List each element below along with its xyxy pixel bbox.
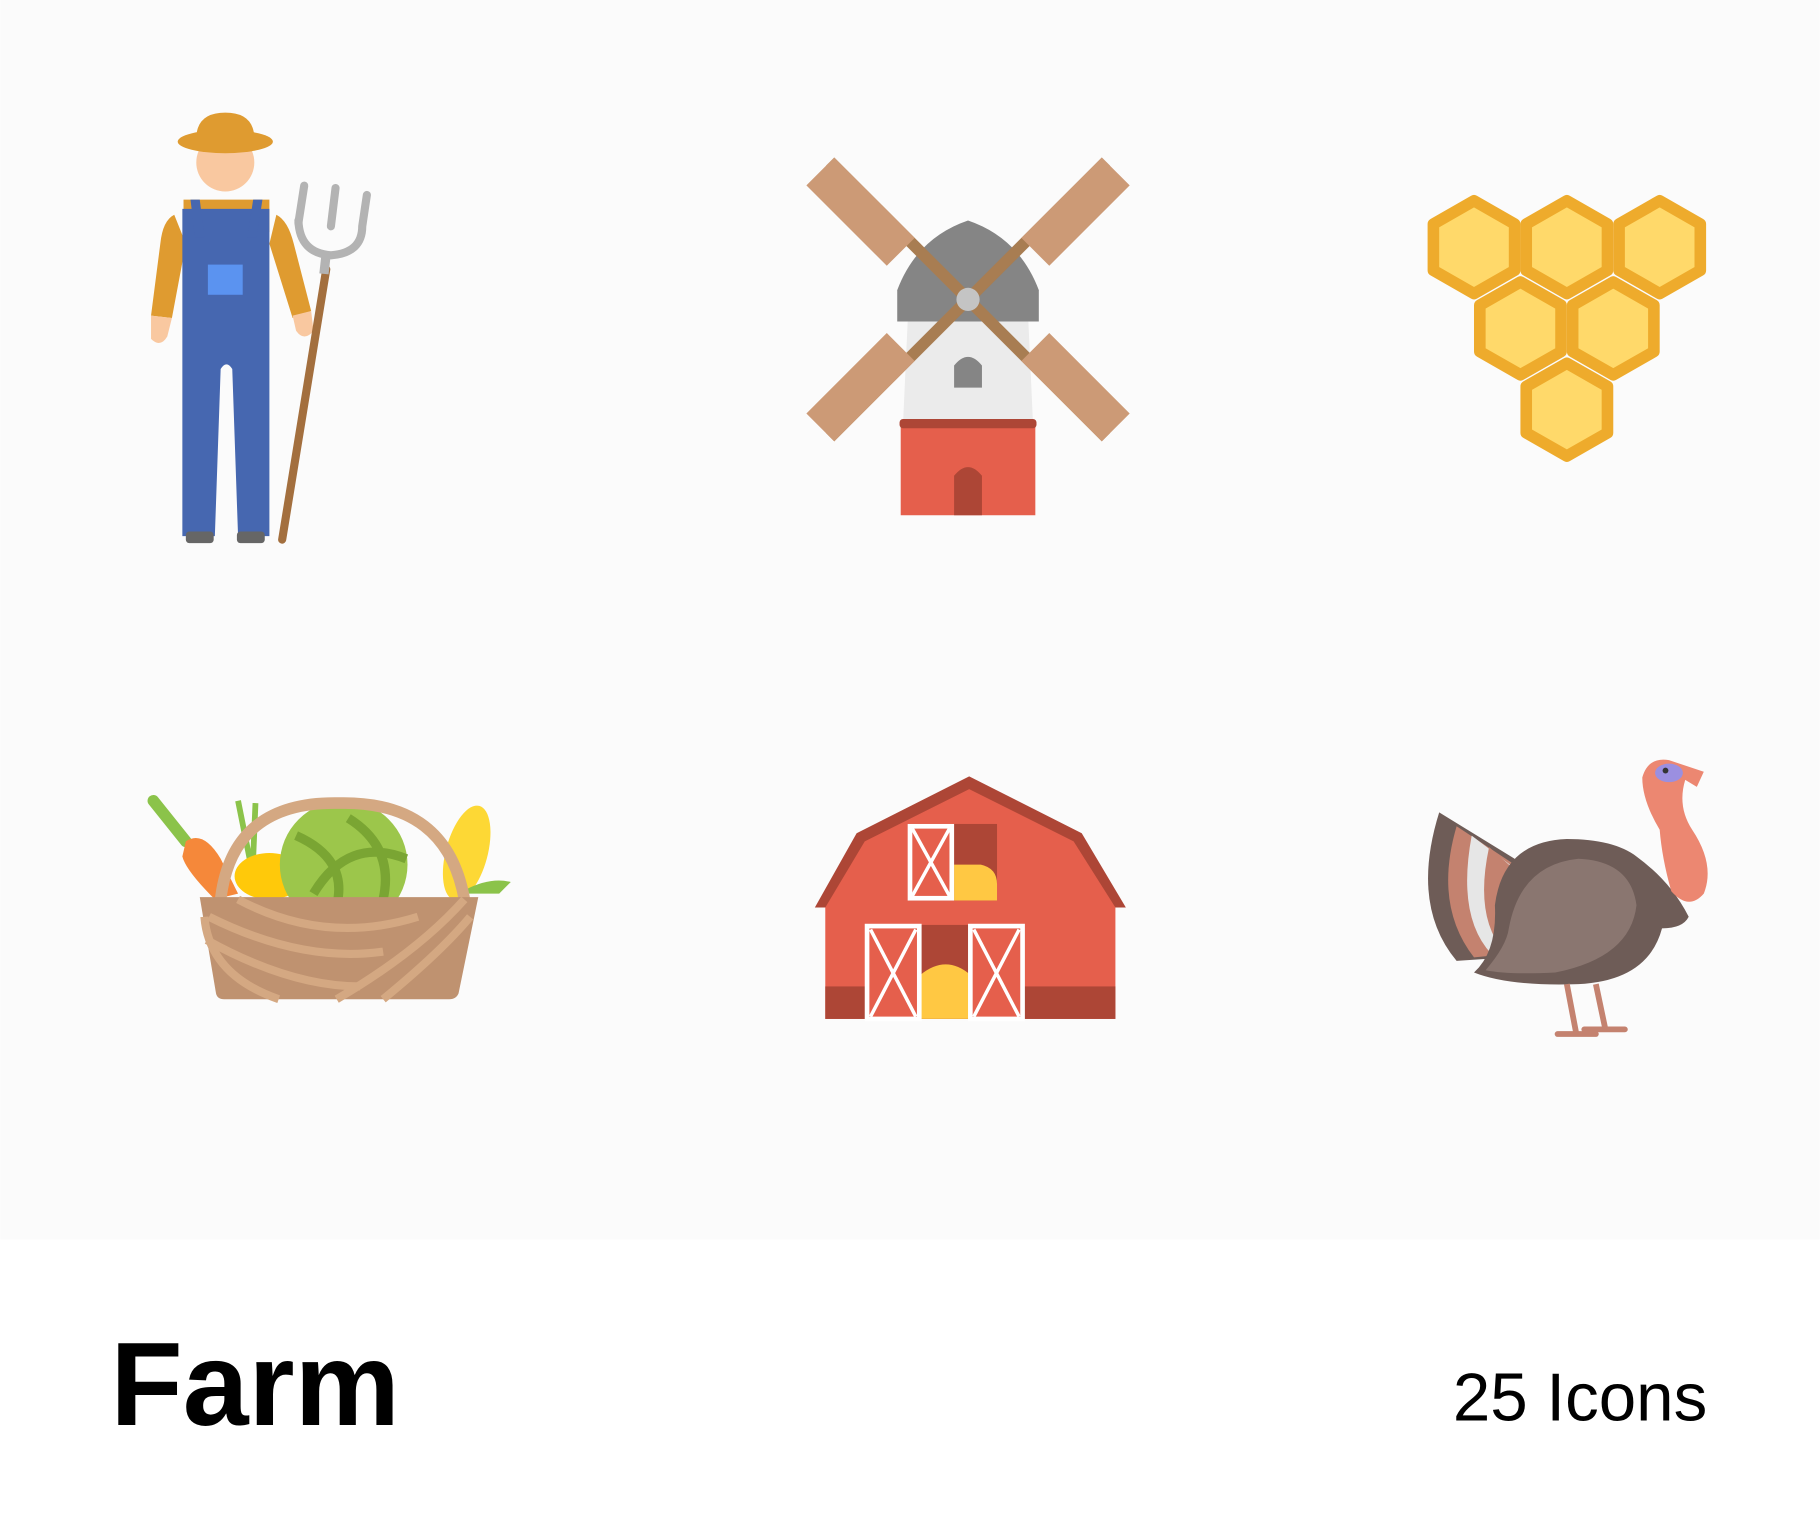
title: Farm <box>110 1319 400 1451</box>
icon: vegetable basket <box>153 800 511 999</box>
icon: honeycomb <box>1433 201 1700 456</box>
subtitle: icon count: 25 Icons <box>1453 1360 1707 1435</box>
icon: turkey <box>1428 760 1708 1034</box>
icon: barn <box>815 776 1126 1019</box>
icon: windmill <box>806 138 1130 515</box>
icon: farmer <box>151 113 367 543</box>
